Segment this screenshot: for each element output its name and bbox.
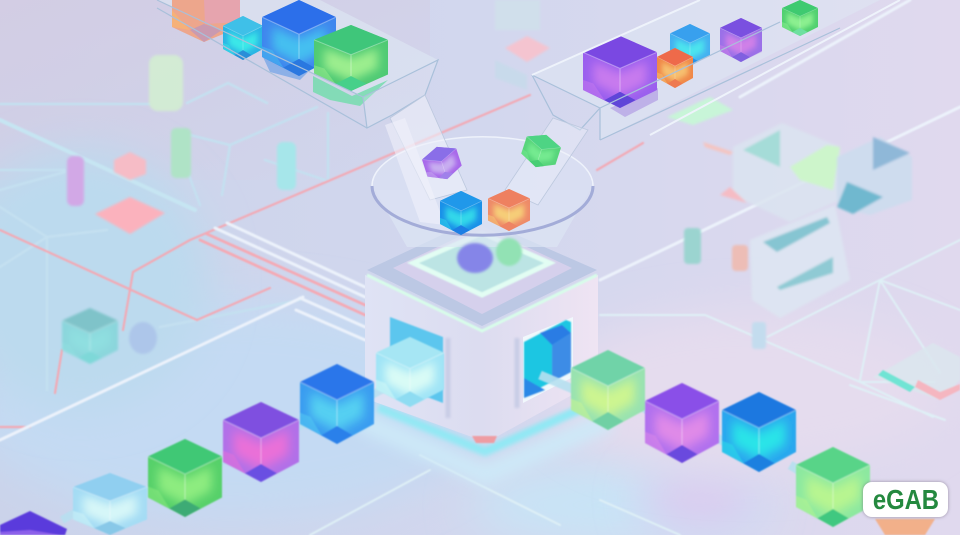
green top panel <box>790 145 840 190</box>
reflection under purple cube <box>610 88 658 117</box>
conveyor: top left tray <box>157 0 438 128</box>
cylinder: green <box>171 128 191 178</box>
logo: eGAB: eGAB <box>872 484 939 515</box>
glass reflection under blue cube <box>262 55 310 80</box>
teal triangle left <box>743 130 780 167</box>
diamond: green pad <box>667 97 733 125</box>
cylinder: pale green <box>149 55 183 111</box>
cube: purple <box>223 402 299 482</box>
cube: purple large <box>583 36 657 108</box>
cube: small blue <box>670 24 710 66</box>
cube: green in tube <box>519 129 563 173</box>
output chain left <box>0 337 444 535</box>
tube right <box>505 118 588 205</box>
cube: small green <box>782 0 818 36</box>
blurred cube: green <box>496 238 522 266</box>
cube: light green <box>571 350 645 430</box>
teal cube <box>62 308 118 364</box>
cylinder: purple <box>67 156 84 206</box>
machine <box>360 218 610 475</box>
cube: green <box>314 25 388 91</box>
tube left <box>390 95 467 200</box>
cube: green <box>148 439 222 517</box>
logo: eGAB <box>863 482 948 517</box>
glass reflection under green cube <box>313 76 388 106</box>
cube: orange falling <box>488 189 530 231</box>
funnel <box>372 95 593 273</box>
glass post <box>752 322 766 349</box>
diamond: small pink <box>114 152 146 180</box>
background objects left <box>62 0 550 364</box>
cylinder: green-blue <box>684 228 701 264</box>
cube: indigo <box>0 511 67 535</box>
cube: cyan blue <box>722 392 796 472</box>
lower glass block <box>750 205 850 318</box>
cube: pale blue <box>73 473 147 535</box>
cube: blue falling <box>440 191 482 235</box>
cube: small cyan <box>223 16 263 60</box>
cube: green <box>796 447 870 527</box>
teal strip <box>763 217 830 252</box>
diamond: pink pad <box>95 197 165 234</box>
orange strip <box>703 142 733 155</box>
cube: small orange <box>657 48 693 88</box>
glass cluster block <box>733 123 840 222</box>
glass block top <box>495 0 540 30</box>
tray front and hopper <box>157 0 438 128</box>
teal triangle bottom <box>837 182 883 214</box>
teal triangle top <box>873 137 910 170</box>
output chain right <box>571 350 935 535</box>
left window <box>390 317 443 403</box>
cube: purple <box>645 383 719 463</box>
tray front and hopper <box>532 22 840 140</box>
small blue orb <box>129 322 157 354</box>
cube in right window <box>524 320 571 398</box>
cylinder: cyan <box>277 142 296 190</box>
conveyor: top right tray <box>532 0 900 140</box>
blurred cube: purple <box>457 243 493 273</box>
pillar shade <box>448 338 517 418</box>
connector rods right <box>540 375 900 500</box>
base glow <box>378 405 590 452</box>
inner plate <box>393 226 572 314</box>
cube: orange <box>172 0 240 42</box>
cube: small purple <box>720 18 762 62</box>
teal strip lower <box>777 257 833 290</box>
cube: blue <box>300 364 374 444</box>
orange patch under logo <box>875 519 935 535</box>
pink wedge <box>720 187 747 203</box>
background objects right <box>667 97 912 349</box>
glass cube: teal right <box>837 137 912 215</box>
top plate <box>367 218 597 326</box>
right window <box>523 317 573 403</box>
cube: pale ice in machine <box>376 337 444 407</box>
connector rods left <box>62 388 385 520</box>
diamond: pink top <box>505 36 550 62</box>
cube: blue <box>262 0 336 76</box>
cube: purple in tube <box>420 141 464 185</box>
reflection small purple <box>722 38 762 62</box>
machine body <box>365 275 598 440</box>
glowing square <box>413 233 550 295</box>
cylinder: orange <box>732 245 748 271</box>
